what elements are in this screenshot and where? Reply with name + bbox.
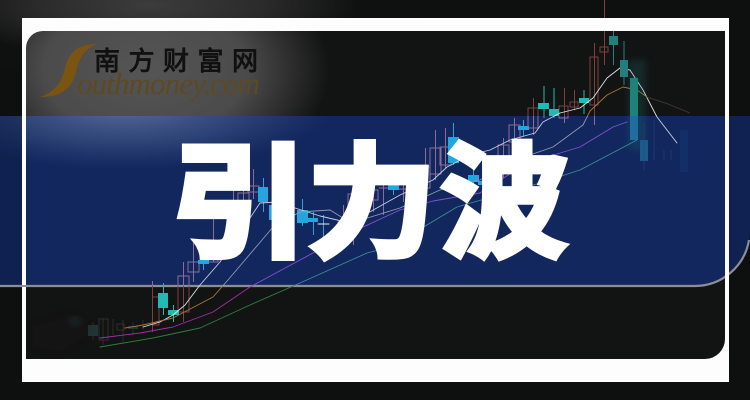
band outer edge tint left: [0, 116, 22, 286]
faint wick lines: [644, 120, 671, 170]
blue title band: [0, 116, 750, 286]
faint distant candle: [680, 130, 688, 172]
band outer edge tint right: [729, 116, 750, 274]
teal candle above band: [630, 78, 638, 116]
top teal candle wick: [614, 31, 624, 85]
moving average lines inside band: [198, 116, 678, 286]
main title: 引力波: [170, 134, 568, 274]
candlestick chart outside band: [152, 0, 608, 332]
top-left grey glow outside the frame: [0, 0, 420, 70]
upper faint tail tan: [647, 97, 690, 113]
grey band line crossing left frame: [0, 285, 27, 287]
falling teal candles at right: [609, 31, 690, 172]
引: 引: [170, 135, 309, 273]
logo domain: outhmoney.com: [77, 66, 260, 101]
logo swoosh: [40, 44, 97, 97]
band bottom grey outline: [0, 240, 749, 286]
faded candles lower left: [30, 312, 143, 355]
teal glow: [628, 60, 646, 150]
candlestick chart inside band: [152, 116, 595, 286]
blue part of falling candle: [630, 116, 638, 140]
faint falling candle: [640, 140, 648, 161]
logo: Southmoney: [40, 44, 260, 101]
moving average lines outside band: [100, 68, 677, 347]
波: 波: [440, 135, 568, 274]
top teal candle: [609, 36, 618, 45]
inner dark panel with watermark glow: [26, 31, 725, 359]
logo Chinese name: 南方财富网: [94, 46, 258, 76]
力: 力: [307, 134, 437, 273]
logo glow panel: [26, 31, 340, 125]
band highlight: [0, 116, 360, 190]
second teal candle: [620, 60, 628, 77]
